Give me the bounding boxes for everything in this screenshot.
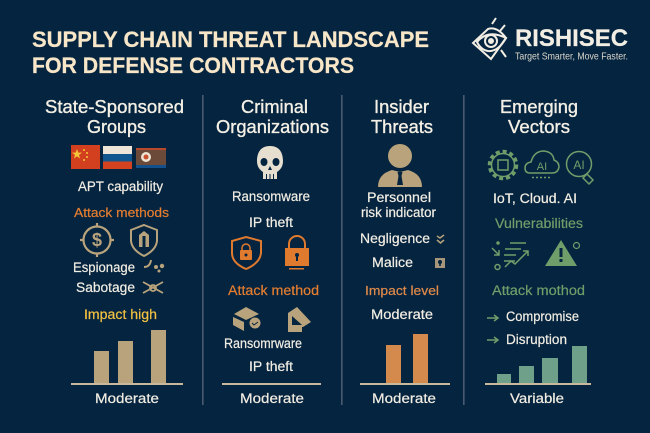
heading: vulnerabilities: Vulnerabilities [495, 216, 583, 231]
text: IP theft: IP theft [249, 359, 293, 374]
heading: Groups [87, 117, 146, 137]
heading [371, 97, 433, 137]
heading: impact high: Impact high [84, 307, 157, 322]
text: sabotage: Sabotage [76, 280, 135, 295]
heading [216, 97, 329, 137]
icon: AI magnifier: AI [573, 158, 585, 172]
heading: attack method: Attack method [228, 283, 319, 298]
icon: skull [257, 146, 283, 179]
column divider 1 [202, 95, 204, 405]
text: ransomrware: Ransomrware [224, 336, 302, 351]
heading: Criminal [241, 97, 308, 117]
heading [45, 97, 184, 137]
icon: trend lines [492, 242, 528, 270]
icon: gear chip [490, 152, 516, 178]
logo: RISHISEC [473, 18, 628, 62]
icon: dollar target [80, 223, 114, 257]
label: variable: Variable [510, 391, 564, 406]
text: personnel risk indicator [361, 190, 436, 220]
heading: Vectors [508, 117, 570, 137]
text: espionage [73, 260, 164, 275]
text: moderate: Moderate [371, 307, 433, 322]
icon: person [378, 144, 422, 187]
text: personnel risk indicator: Personnel [367, 190, 431, 205]
icon: flags [71, 145, 166, 169]
text: malice: Malice [372, 255, 413, 270]
icon: espionage mark [144, 260, 164, 272]
heading: attack methods: Attack methods [74, 205, 170, 220]
heading [500, 97, 578, 137]
panel: state-sponsored groups [45, 97, 184, 406]
heading: Organizations [216, 117, 329, 137]
icon: chevrons [437, 235, 444, 243]
icon: document pen [288, 307, 311, 332]
logo: RISHISEC: RISHISEC [515, 25, 628, 52]
heading: Emerging [500, 97, 578, 117]
text: espionage: Espionage [73, 260, 135, 275]
icon: dollar target: $ [92, 230, 102, 250]
column divider 2 [341, 95, 343, 405]
text: sabotage [76, 280, 163, 295]
label: moderate: Moderate [372, 391, 436, 406]
text: personnel risk indicator: risk indicator [361, 205, 436, 220]
text: APT capability: APT capability [78, 179, 163, 194]
text: IoT, Cloud, AI: IoT, Cloud. AI [493, 191, 577, 206]
text: ransomware: Ransomware [232, 189, 310, 204]
bar chart [71, 330, 183, 385]
axis line [222, 383, 321, 385]
text: negligence: Negligence [360, 231, 430, 246]
icon: sabotage mark [143, 282, 163, 293]
heading: Insider [374, 97, 429, 117]
heading: impact level: Impact level [365, 283, 439, 298]
list item: compromise: Compromise [506, 309, 579, 324]
icon: eye logo [473, 18, 506, 59]
icon: padlock [285, 236, 309, 270]
icon: AI cloud [525, 151, 559, 178]
bar chart [485, 346, 591, 385]
icon: AI cloud: AI [537, 161, 547, 173]
text: malice [372, 255, 445, 270]
title [32, 27, 429, 78]
heading: Threats [371, 117, 433, 137]
title: FOR DEFENSE CONTRACTORS [32, 53, 354, 78]
heading: attack mothod: Attack mothod [492, 283, 585, 298]
list item: disruption: Disruption [506, 332, 567, 347]
icon: shield [131, 225, 157, 256]
bar chart [360, 334, 450, 385]
icon: warning triangle [545, 240, 580, 266]
icon: small lock [435, 258, 445, 268]
text: IP theft: IP theft [249, 215, 293, 230]
panel: emerging vectors [485, 97, 593, 406]
title: SUPPLY CHAIN THREAT LANDSCAPE [32, 27, 429, 52]
panel: insider threats [360, 97, 450, 406]
logo: RISHISEC: Target Smarter, Move Faster. [515, 50, 628, 62]
label: moderate: Moderate [240, 391, 304, 406]
heading: State-Sponsored [45, 97, 184, 117]
panel: criminal organizations [216, 97, 329, 406]
column divider 3 [463, 95, 465, 405]
label: moderate: Moderate [95, 391, 159, 406]
icon: AI magnifier [566, 152, 593, 184]
icon: shield lock [232, 237, 261, 269]
icon: box [233, 307, 260, 331]
